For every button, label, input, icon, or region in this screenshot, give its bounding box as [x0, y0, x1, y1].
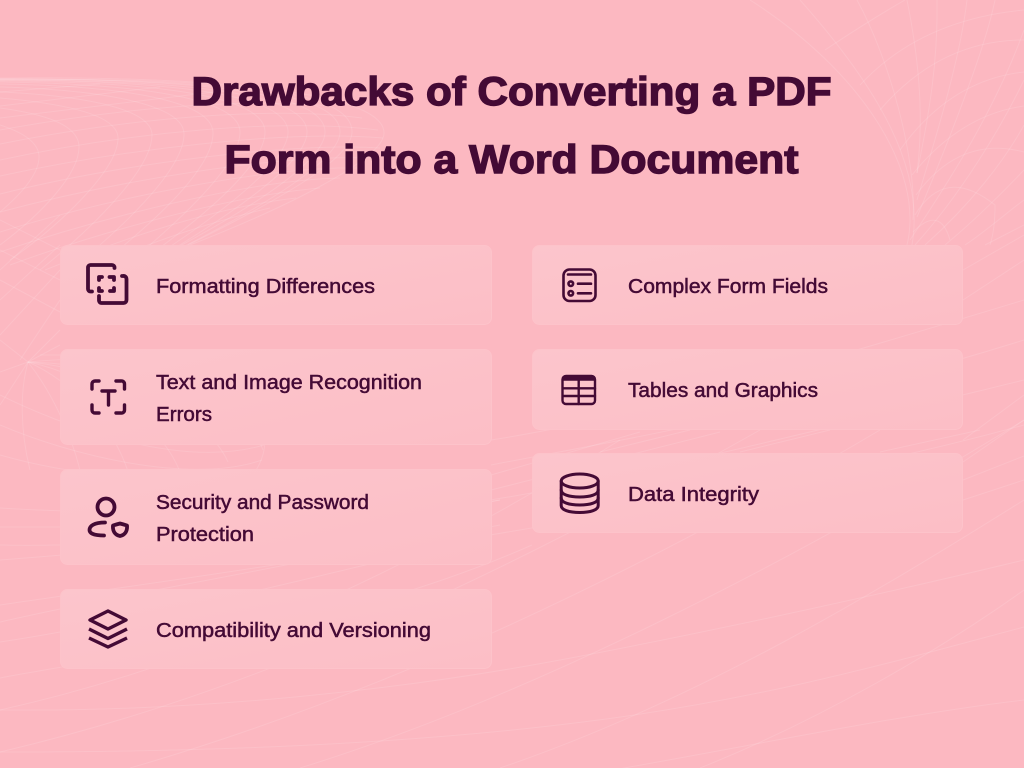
label: Complex Form Fields [628, 276, 828, 298]
title: Drawbacks of Converting a PDF [192, 70, 832, 114]
panel: complex form fields [532, 246, 962, 324]
icon: database [561, 474, 598, 512]
icon: user with shield [90, 498, 127, 536]
icon: layers [89, 611, 127, 647]
icon: overlapping squares [88, 265, 127, 303]
label: Protection [156, 524, 254, 546]
panel: formatting differences [60, 246, 492, 324]
panel: security and password protection [60, 470, 492, 564]
label: Formatting Differences [156, 276, 375, 298]
panel: compatibility and versioning [60, 590, 492, 668]
label: Tables and Graphics [628, 380, 818, 402]
icon: table [562, 376, 595, 404]
label: Data Integrity [628, 484, 759, 506]
label [156, 492, 369, 546]
icon: form list [564, 270, 596, 301]
label: Security and Password [156, 492, 369, 514]
label: Errors [156, 404, 212, 426]
label: Text and Image Recognition [156, 372, 422, 394]
icon: text scan [92, 381, 125, 413]
panel: data integrity [532, 454, 962, 532]
title: Form into a Word Document [224, 138, 798, 182]
panel: tables and graphics [532, 350, 962, 430]
panel: text and image recognition errors [60, 350, 492, 444]
label: Compatibility and Versioning [156, 620, 431, 642]
title [192, 70, 832, 182]
label [156, 372, 422, 426]
